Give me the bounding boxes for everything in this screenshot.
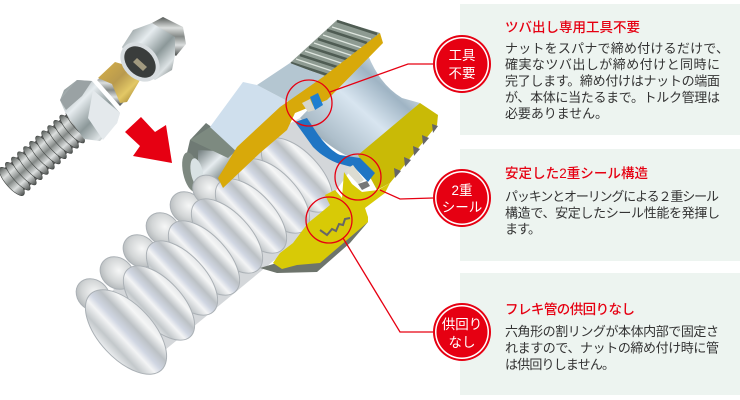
rear silver collars	[179, 123, 243, 194]
text block: no special tool: 完了します。締め付けはナットの端面	[505, 74, 720, 88]
panel: no co-rotation	[460, 273, 740, 395]
blue seal band	[295, 118, 375, 182]
text block: no co-rotation: は供回りしません。	[505, 357, 615, 372]
text block: no co-rotation: れますので、ナットの締め付け時に管	[505, 340, 719, 356]
upper seal	[302, 93, 323, 112]
badge: double seal: シール	[442, 200, 482, 215]
text block: no special tool: 確実なツバ出しが締め付けと同時に	[505, 57, 720, 72]
lower seal	[345, 165, 370, 190]
text block: double seal: ます。	[505, 222, 541, 236]
hex body	[190, 63, 330, 158]
text block: double seal: 構造で、安定したシール性能を発揮し	[505, 206, 720, 220]
threads	[290, 20, 380, 77]
text block: no special tool: 必要ありません。	[505, 106, 608, 121]
callout lines	[330, 64, 433, 332]
connecting tube	[97, 74, 128, 106]
yellow nut	[260, 172, 390, 273]
nut	[60, 80, 120, 141]
threaded body	[112, 17, 186, 90]
upper yellow wall	[218, 33, 383, 188]
badge: no special tool: 不要	[448, 66, 476, 81]
detail circle: upper seal	[286, 80, 332, 126]
text block: double seal: パッキンとオーリングによる２重シール	[505, 189, 719, 204]
panel: no special tool	[460, 4, 740, 135]
badge: no co-rotation	[433, 303, 491, 361]
heading: no special tool: ツバ出し専用工具不要	[505, 20, 640, 35]
badge: no co-rotation: 供回り	[442, 317, 482, 332]
flexible tube	[0, 102, 100, 199]
photo: assembled parts of fitting	[0, 17, 186, 199]
badge: no special tool	[433, 35, 491, 93]
badge: double seal: 2重	[451, 183, 473, 198]
cutaway: fitting cross section	[70, 20, 438, 388]
text block: no special tool	[505, 41, 729, 121]
heading: no co-rotation: フレキ管の供回りなし	[505, 301, 635, 317]
text block: no special tool: ナットをスパナで締め付けるだけで、	[505, 41, 729, 56]
text block: no co-rotation	[505, 324, 719, 372]
lower yellow wall	[358, 103, 438, 190]
brass ring	[98, 62, 140, 103]
arrow: red	[125, 117, 172, 163]
heading: double seal: 安定した2重シール構造	[505, 166, 648, 181]
panel: double seal	[460, 149, 740, 261]
badge: double seal	[433, 169, 491, 227]
detail circle: lower seal	[335, 154, 381, 200]
badge: no special tool: 工具	[448, 48, 476, 63]
bore	[300, 55, 420, 162]
text block: double seal	[505, 189, 720, 236]
detail circle: split ring	[306, 197, 352, 243]
text block: no co-rotation: 六角形の割リングが本体内部で固定さ	[505, 324, 719, 339]
text block: no special tool: が、本体に当たるまで。トルク管理は	[505, 90, 720, 105]
badge: no co-rotation: なし	[448, 335, 476, 350]
flexible tube main	[70, 118, 352, 388]
